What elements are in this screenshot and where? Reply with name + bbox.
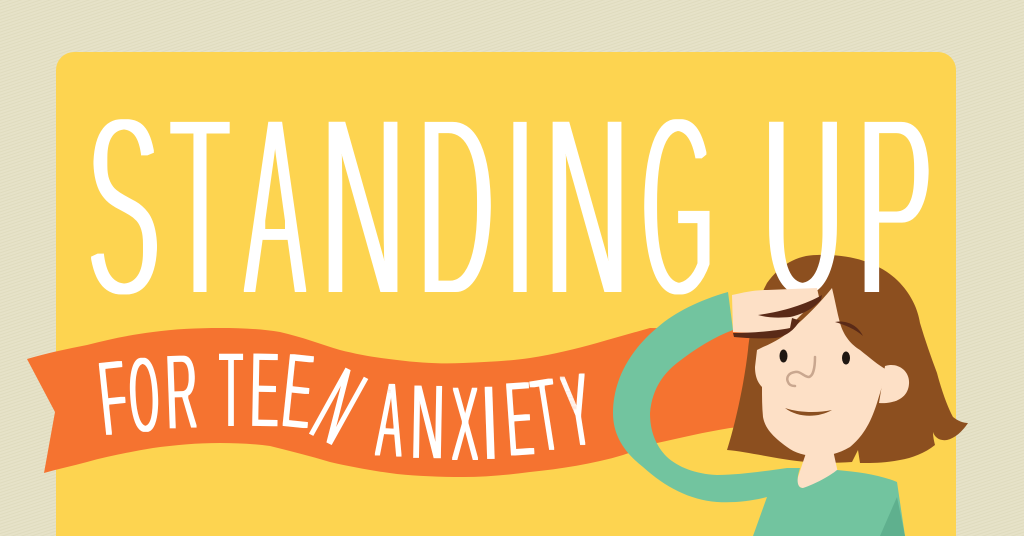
title: standing up: S	[87, 63, 160, 352]
character: girl saluting, body and hair	[727, 255, 968, 463]
smile	[785, 408, 832, 416]
subtitle letters: R	[164, 332, 200, 453]
title: standing up: N	[545, 61, 629, 351]
neck	[797, 450, 838, 488]
subtitle letters	[94, 331, 600, 485]
subtitle letters: I	[479, 362, 500, 484]
subtitle letters: F	[94, 337, 133, 460]
ear	[879, 365, 909, 403]
subtitle letters: X	[451, 365, 479, 485]
title: standing up: G	[641, 63, 715, 352]
subtitle letters: E	[502, 358, 537, 481]
nose	[787, 357, 815, 386]
title: standing up: P	[857, 63, 933, 352]
ribbon banner	[27, 328, 760, 477]
subtitle letters: E	[249, 331, 280, 451]
title: standing up	[87, 61, 933, 352]
face	[755, 288, 887, 456]
title: standing up: I	[506, 61, 534, 351]
subtitle letters: T	[525, 355, 567, 475]
subtitle letters: T	[219, 331, 243, 451]
title: standing up: D	[418, 61, 494, 351]
subtitle letters: O	[126, 335, 162, 457]
slanted letter N: N	[296, 349, 381, 466]
subtitle letters: A	[374, 361, 406, 482]
fingers	[758, 295, 822, 318]
subtitle letters: Y	[555, 349, 600, 470]
title: standing up: U	[762, 63, 844, 352]
subtitle letters: N	[410, 361, 445, 483]
subtitle: for teen anxiety	[94, 331, 600, 485]
title: standing up: T	[170, 63, 230, 352]
eyebrow	[835, 322, 863, 336]
shirt and arm	[613, 292, 905, 536]
eyes	[780, 350, 788, 362]
subtitle letters: E	[277, 331, 318, 453]
hair	[727, 255, 968, 463]
panel: yellow background	[56, 52, 956, 536]
hand	[732, 288, 819, 333]
character: girl saluting, face and arm	[613, 288, 909, 536]
sleeve shading	[880, 497, 905, 536]
title: standing up: A	[244, 63, 306, 352]
title: standing up: N	[321, 61, 405, 351]
